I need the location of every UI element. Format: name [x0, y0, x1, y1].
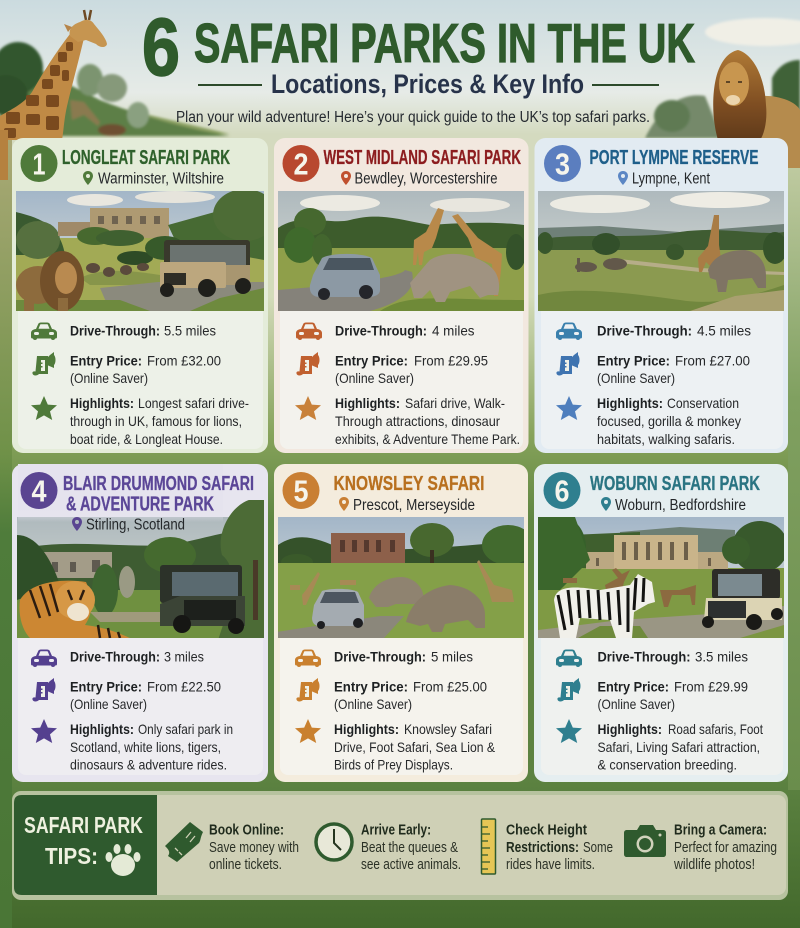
safari jeep	[702, 569, 783, 630]
highlights row	[556, 395, 741, 447]
drive-through row: 4 miles	[432, 322, 474, 338]
highlights row: dinosaurs & adventure rides.	[70, 756, 227, 772]
entry price row	[32, 352, 221, 386]
tip: arrive early: Arrive Early:	[361, 822, 431, 838]
giraffes	[413, 208, 502, 296]
highlights row: focused, gorilla & monkey	[597, 413, 741, 429]
highlights row: Drive, Foot Safari, Sea Lion &	[334, 739, 496, 755]
photo: tiger and jeep	[17, 498, 264, 640]
location: Lympne, Kent	[632, 170, 711, 188]
silver car	[312, 589, 364, 629]
tip: arrive early: Beat the queues &	[361, 840, 458, 856]
number badge 6	[544, 472, 580, 509]
entry price row: From £29.95	[414, 352, 488, 368]
icon: clock	[316, 824, 352, 860]
panel: Longleat Safari Park	[12, 138, 277, 453]
entry price row: Entry Price:	[70, 352, 142, 368]
rhino	[708, 250, 766, 292]
park name	[63, 472, 254, 516]
drive-through row	[31, 322, 216, 340]
tip: check height restrictions	[482, 819, 613, 874]
entry price row: (Online Saver)	[598, 696, 675, 712]
highlights row: Highlights:	[597, 395, 663, 411]
zebra	[554, 574, 655, 638]
tip: bring a camera: Bring a Camera:	[674, 822, 767, 838]
location: Stirling, Scotland	[86, 516, 185, 534]
highlights row: Highlights:	[334, 721, 399, 737]
location: Woburn, Bedfordshire	[615, 497, 746, 514]
entry price row: From £27.00	[675, 352, 750, 368]
photo: lion and safari jeep at Longleat	[16, 189, 277, 311]
number badge 5: 5	[294, 474, 308, 508]
silver car	[310, 254, 380, 300]
entry price row: (Online Saver)	[597, 370, 675, 386]
drive-through row: Drive-Through:	[335, 322, 427, 338]
highlights row: Highlights:	[598, 721, 662, 737]
rhino	[410, 254, 499, 302]
highlights row: Scotland, white lions, tigers,	[70, 739, 221, 755]
tip: bring a camera: Perfect for amazing	[674, 840, 777, 856]
park name: & ADVENTURE PARK	[66, 492, 214, 516]
safari jeep	[160, 240, 251, 297]
back rhino	[369, 577, 424, 607]
entry price row	[32, 678, 221, 712]
drive-through row	[31, 648, 204, 667]
number badge 1: 1	[32, 146, 46, 182]
drive-through row: 3.5 miles	[695, 648, 748, 664]
entry price row: Entry Price:	[597, 352, 670, 368]
entry price row	[556, 352, 750, 386]
drive-through row	[296, 322, 474, 340]
number badge 4	[20, 472, 58, 509]
tip: check height restrictions: Restrictions:	[506, 840, 579, 856]
title	[142, 2, 695, 93]
drive-through row	[295, 648, 473, 667]
drive-through row: 5 miles	[431, 648, 473, 664]
highlights row	[31, 719, 233, 772]
drive-through row: Drive-Through:	[598, 648, 690, 664]
icon: camera	[624, 825, 666, 857]
lion	[16, 251, 84, 311]
entry price row	[557, 678, 748, 712]
drive-through row: Drive-Through:	[70, 648, 160, 664]
entry price row: From £22.50	[147, 678, 221, 694]
panel: safari park tips	[12, 791, 788, 900]
location: Warminster, Wiltshire	[98, 170, 224, 188]
entry price row: Entry Price:	[334, 678, 408, 694]
highlights row: Safari, Living Safari attraction,	[598, 739, 760, 755]
panel: Port Lympne Reserve	[534, 138, 788, 453]
drive-through row: Drive-Through:	[334, 648, 426, 664]
highlights row: & conservation breeding.	[598, 756, 737, 772]
highlights row	[295, 395, 520, 447]
photo: estate, car and rhinos	[276, 517, 534, 638]
highlights row: Highlights:	[70, 721, 134, 737]
icon: ruler	[482, 819, 496, 874]
highlights row: Highlights:	[335, 395, 400, 411]
highlights row	[31, 395, 249, 447]
number badge 2	[282, 145, 320, 182]
highlights row: Conservation	[667, 395, 739, 411]
panel: West Midland Safari Park	[274, 138, 528, 453]
number badge 5	[282, 472, 320, 509]
highlights row: Longest safari drive-	[138, 395, 249, 411]
drive-through row: 4.5 miles	[697, 322, 751, 338]
highlights row: exhibits, & Adventure Theme Park.	[335, 431, 520, 447]
safari jeep	[160, 565, 245, 634]
tip: book online: online tickets.	[209, 857, 282, 873]
number badge 3: 3	[555, 146, 570, 182]
entry price row: From £32.00	[147, 352, 221, 368]
giraffe illustration	[0, 10, 107, 180]
front rhino	[406, 585, 485, 632]
tip: check height restrictions: Check Height	[506, 822, 587, 838]
number badge 3	[544, 145, 581, 182]
number badge 6: 6	[554, 474, 570, 508]
panel: Woburn Safari Park	[534, 464, 788, 782]
tip: bring a camera	[624, 822, 777, 873]
number badge 1	[20, 145, 58, 182]
highlights row: habitats, walking safaris.	[597, 431, 735, 447]
giraffe and deer	[290, 560, 514, 605]
giraffe	[698, 215, 722, 272]
entry price row	[296, 678, 487, 712]
highlights row: Through attractions, dinosaur	[335, 413, 500, 429]
highlights row	[556, 719, 763, 772]
photo: zebra, stately home and jeep	[538, 517, 788, 638]
park name: BLAIR DRUMMOND SAFARI	[63, 472, 254, 495]
park name: KNOWSLEY SAFARI	[334, 472, 484, 495]
drive-through row	[556, 648, 748, 667]
tip: arrive early	[316, 822, 461, 873]
tip: book online: Book Online:	[209, 822, 284, 838]
highlights row	[295, 719, 496, 772]
drive-through row	[556, 322, 751, 340]
tip: arrive early: see active animals.	[361, 857, 461, 873]
icon: paw	[106, 844, 140, 876]
subtitle: Locations, Prices & Key Info	[271, 69, 584, 99]
highlights row: boat ride, & Longleat House.	[70, 431, 223, 447]
tip: book online: Save money with	[209, 840, 299, 856]
park name: WEST MIDLAND SAFARI PARK	[324, 146, 521, 169]
icon: ticket	[165, 822, 203, 862]
drive-through row: Drive-Through:	[597, 322, 692, 338]
tip: check height restrictions: Some	[583, 840, 613, 856]
highlights row: Highlights:	[70, 395, 134, 411]
highlights row: Birds of Prey Displays.	[334, 756, 453, 772]
number badge 4: 4	[32, 474, 47, 508]
tagline: Plan your wild adventure! Here’s your quick guide to the UK’s top safari parks.	[176, 109, 650, 126]
entry price row: From £29.99	[674, 678, 748, 694]
panel: Blair Drummond Safari & Adventure Park	[12, 464, 268, 782]
drive-through row: 3 miles	[164, 648, 204, 664]
entry price row: (Online Saver)	[335, 370, 414, 386]
entry price row: Entry Price:	[335, 352, 408, 368]
drive-through row: 5.5 miles	[164, 322, 216, 338]
entry price row	[296, 352, 488, 386]
highlights row: Safari drive, Walk-	[405, 395, 505, 411]
entry price row: From £25.00	[413, 678, 487, 694]
tip: check height restrictions: rides have limits.	[506, 857, 595, 873]
tips heading	[14, 795, 157, 895]
photo: car, giraffes and rhino	[278, 191, 526, 311]
entry price row: (Online Saver)	[70, 696, 147, 712]
entry price row: Entry Price:	[70, 678, 142, 694]
highlights row: Road safaris, Foot	[668, 721, 763, 737]
entry price row: (Online Saver)	[70, 370, 148, 386]
number badge 2: 2	[294, 146, 308, 182]
entry price row: Entry Price:	[598, 678, 669, 694]
drive-through row: Drive-Through:	[70, 322, 160, 338]
title: 6	[142, 2, 180, 93]
park name: LONGLEAT SAFARI PARK	[62, 146, 230, 169]
location: Bewdley, Worcestershire	[354, 170, 498, 188]
highlights row: through in UK, famous for lions,	[70, 413, 242, 429]
lion illustration	[713, 50, 800, 168]
header fade behind the title	[18, 464, 223, 522]
highlights row: Only safari park in	[138, 721, 233, 737]
photo: giraffe and rhino on grassland	[537, 191, 787, 311]
deer	[563, 568, 696, 607]
panel: Knowsley Safari	[274, 464, 534, 782]
tiger	[19, 581, 130, 638]
tip: book online	[165, 822, 299, 873]
tip: bring a camera: wildlife photos!	[673, 857, 755, 873]
entry price row: (Online Saver)	[334, 696, 412, 712]
location: Prescot, Merseyside	[353, 497, 475, 514]
highlights row: Knowsley Safari	[404, 721, 492, 737]
tips heading: TIPS:	[45, 843, 98, 869]
tips heading: SAFARI PARK	[24, 812, 143, 838]
